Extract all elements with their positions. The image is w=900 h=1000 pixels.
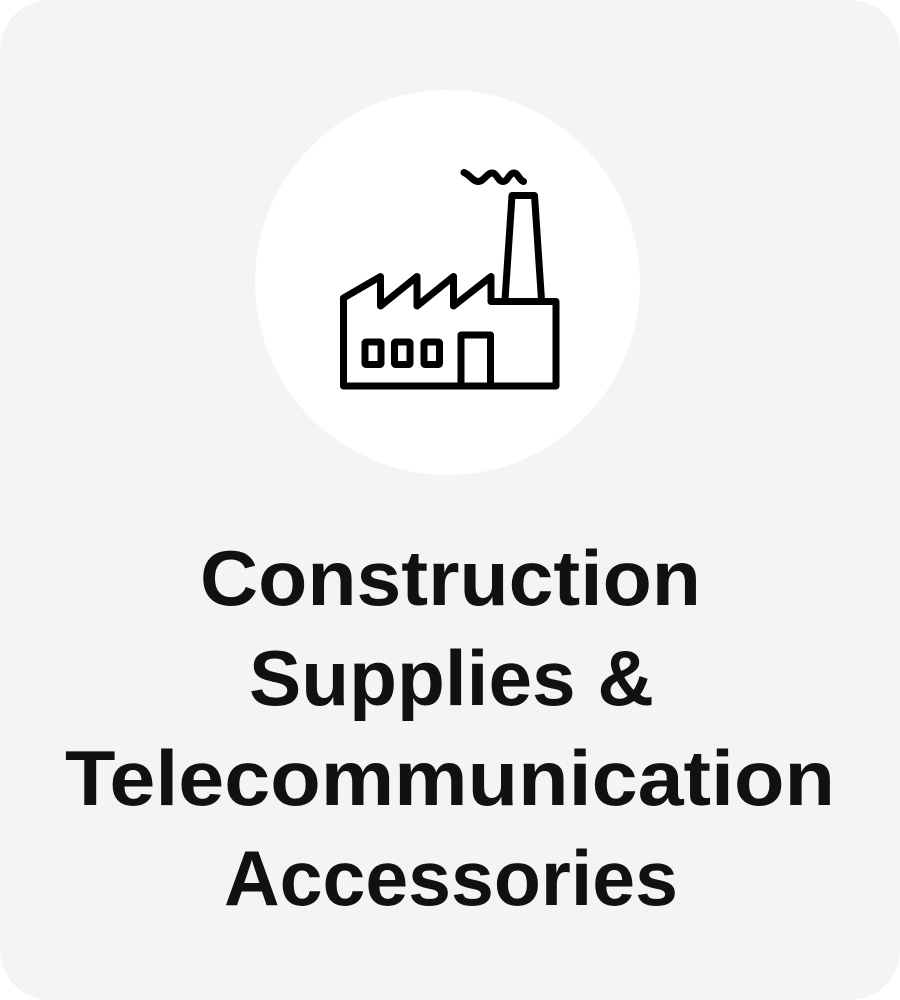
icon: factory (344, 172, 556, 386)
icon backdrop: white circle (255, 90, 640, 475)
title (65, 534, 835, 922)
title: Supplies & (249, 634, 654, 722)
title: Construction (200, 534, 701, 622)
title: Telecommunication (65, 734, 835, 822)
title: Accessories (224, 834, 678, 922)
